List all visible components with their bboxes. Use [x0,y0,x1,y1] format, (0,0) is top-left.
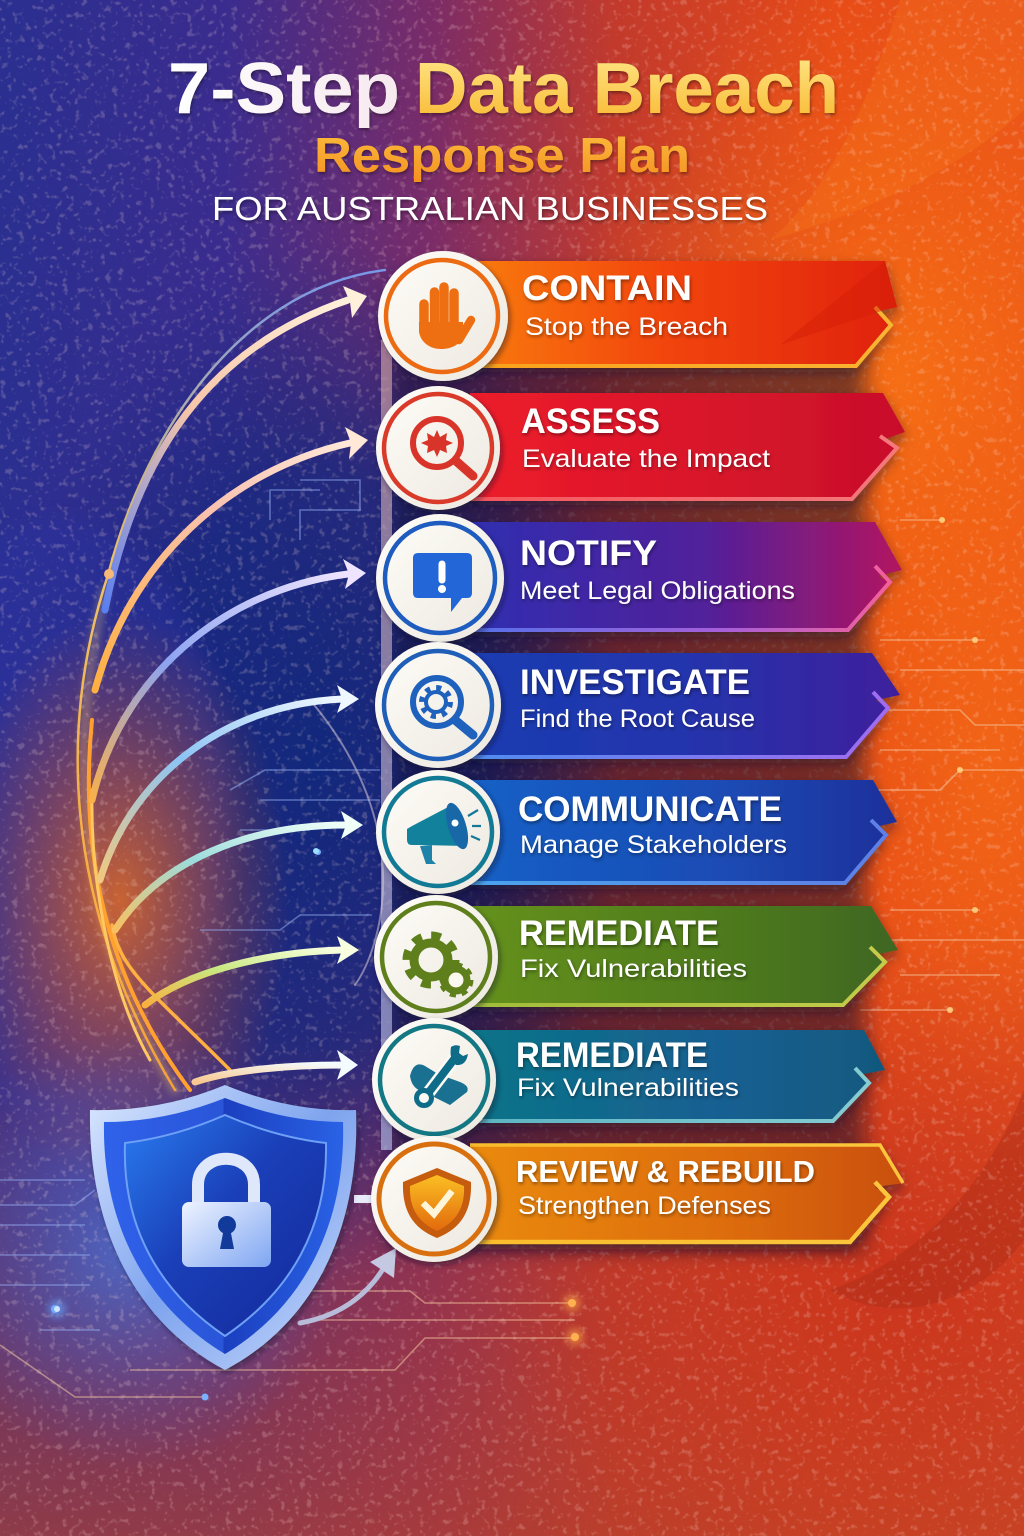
icon: alert speech bubble [376,514,504,642]
subheading: Meet Legal Obligations [520,577,795,605]
banner [470,906,898,1006]
title line 2: Response Plan [314,129,690,183]
title line 3: FOR AUSTRALIAN BUSINESSES [212,190,768,227]
flow arrows from shield [78,270,396,1323]
heading: REVIEW & REBUILD [516,1154,815,1189]
arrow 6 to remediate [145,936,359,1005]
vertical timeline bar [381,340,392,1150]
step 5: communicate [376,770,897,894]
shield with padlock [90,1085,356,1370]
arrow 3 to notify [92,559,366,800]
circuit lines [0,480,1024,1400]
banner [470,653,900,757]
step 2: assess [376,386,905,510]
step 4: investigate [375,642,900,768]
icon: shield check [371,1136,497,1262]
dark backing behind banners [392,280,865,1250]
subheading: Strengthen Defenses [518,1192,771,1220]
step 1: contain [378,251,897,381]
subheading: Evaluate the Impact [522,445,770,473]
title line 1: 7-Step [168,49,400,129]
arrow 7 to remediate [195,1050,358,1082]
arrow 5 to communicate [115,811,363,930]
glow points [49,569,583,1345]
heading: ASSESS [521,402,660,441]
heading: NOTIFY [520,534,657,573]
heading: INVESTIGATE [520,663,750,702]
subheading: Manage Stakeholders [520,831,787,859]
icon: hand [378,251,508,381]
arrow 1 to contain [105,286,367,610]
heading: REMEDIATE [516,1036,708,1075]
icon: wrench and gear [372,1018,496,1142]
banner [470,522,902,631]
arrow 4 to investigate [100,685,359,880]
heading: COMMUNICATE [518,790,782,829]
step 8: review and rebuild [371,1136,904,1262]
title line 1 [168,49,839,129]
title line 1: Data Breach [415,49,839,129]
step 3: notify [376,514,902,642]
subheading: Find the Root Cause [520,705,755,733]
banner [470,780,897,883]
padlock [182,1159,271,1267]
icon: magnifier with gear [375,642,501,768]
icon: megaphone [376,770,500,894]
icon: magnifier with burst [376,386,500,510]
icon: gears [374,895,498,1019]
step 7: remediate teal [372,1018,885,1142]
heading: CONTAIN [522,269,692,308]
connector shield to review [354,1195,382,1203]
banner [470,1144,904,1243]
banner [470,1030,885,1121]
subheading: Fix Vulnerabilities [520,955,747,983]
subheading: Stop the Breach [525,313,728,341]
subheading: Fix Vulnerabilities [517,1074,739,1102]
banner [470,261,897,366]
heading: REMEDIATE [519,914,719,953]
arrow to review [300,1248,396,1323]
banner [470,392,905,499]
step 6: remediate green [374,895,898,1019]
title [168,49,839,227]
arrow 2 to assess [95,427,368,690]
